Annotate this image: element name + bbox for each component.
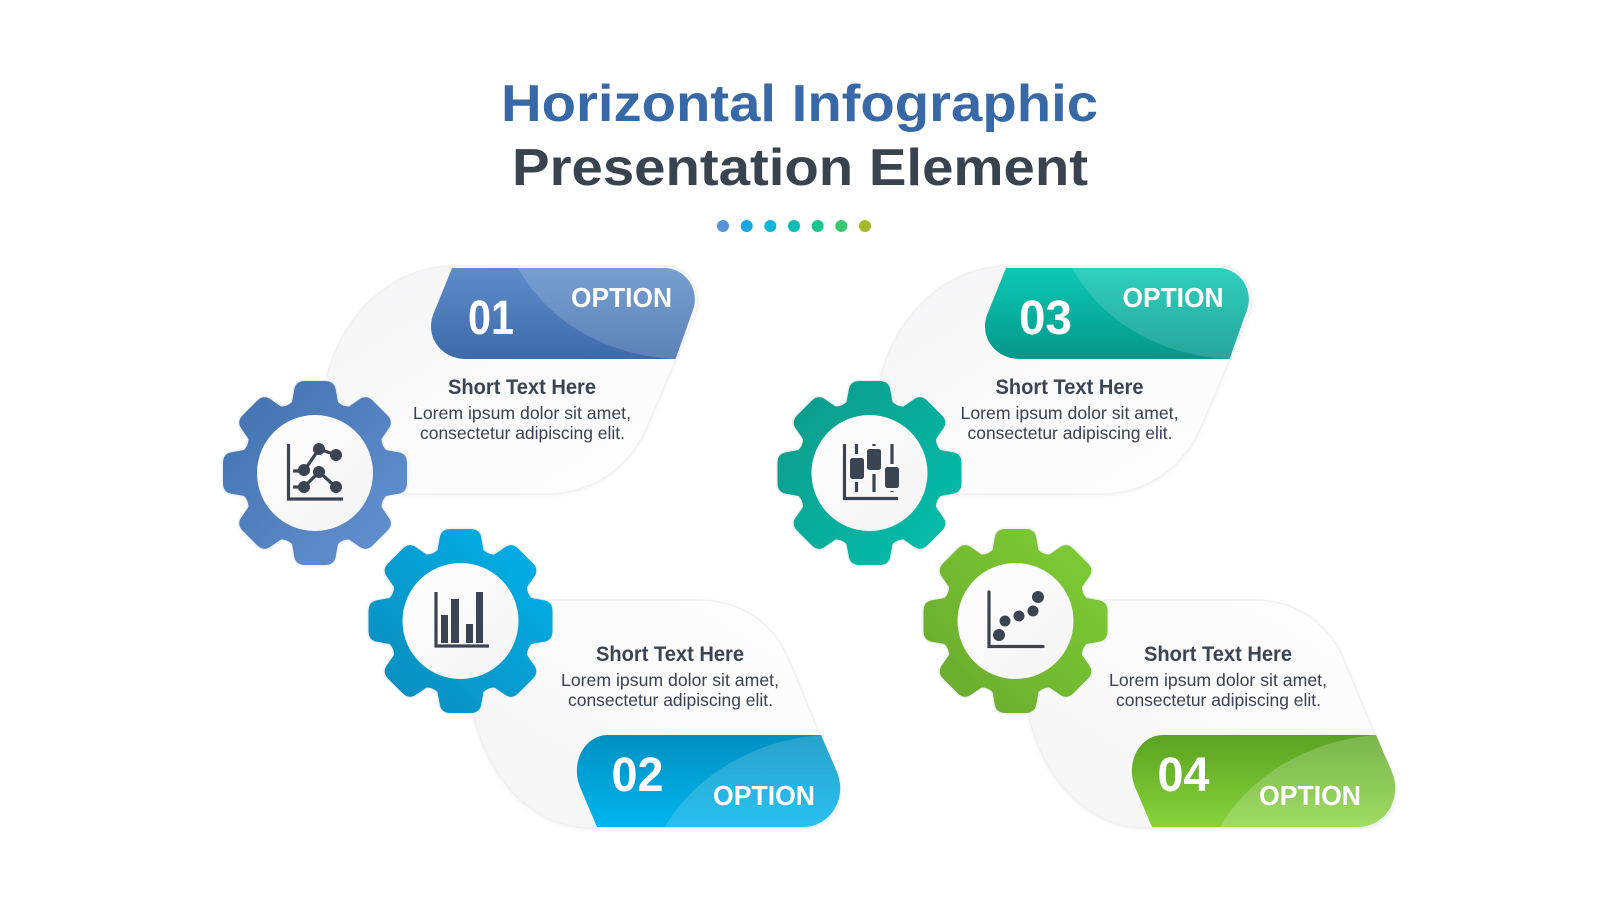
title <box>501 75 1098 197</box>
panel: option 02 <box>470 600 841 828</box>
text: option 01 <box>413 376 631 443</box>
title: Presentation Element <box>512 139 1088 197</box>
text: option 01: consectetur adipiscing elit. <box>420 423 625 443</box>
text: option 01: Lorem ipsum dolor sit amet, <box>413 403 631 423</box>
header: option 03: OPTION <box>1122 282 1224 313</box>
header: option 04: OPTION <box>1259 780 1361 811</box>
text: option 04: Short Text Here <box>1144 643 1292 666</box>
panel: option 01 <box>327 266 698 494</box>
header: option 04: 04 <box>1158 749 1210 802</box>
text: option 02: consectetur adipiscing elit. <box>568 690 773 710</box>
gear: option 02 <box>368 529 552 713</box>
title: Horizontal Infographic <box>501 75 1098 133</box>
text: option 03: consectetur adipiscing elit. <box>968 423 1172 443</box>
panel: option 04 <box>1025 600 1396 828</box>
header: option 01: 01 <box>468 292 514 345</box>
header: option 01: OPTION <box>571 282 672 313</box>
dotted divider <box>717 220 871 232</box>
header: option 03 <box>985 268 1249 359</box>
text: option 03 <box>960 376 1178 443</box>
gear: option 04 <box>924 529 1108 713</box>
header: option 02: OPTION <box>713 780 815 811</box>
icon: line chart <box>288 443 343 499</box>
text: option 04: Lorem ipsum dolor sit amet, <box>1109 670 1327 690</box>
text: option 02: Lorem ipsum dolor sit amet, <box>561 670 779 690</box>
icon: scatter chart <box>989 591 1044 646</box>
gear: option 03 <box>778 381 962 565</box>
icon: candlestick chart <box>844 444 899 498</box>
header: option 03: 03 <box>1019 292 1072 345</box>
text: option 02 <box>561 643 779 710</box>
text: option 02: Short Text Here <box>596 643 744 666</box>
text: option 03: Lorem ipsum dolor sit amet, <box>960 403 1178 423</box>
header: option 02: 02 <box>612 749 664 802</box>
text: option 04: consectetur adipiscing elit. <box>1116 690 1321 710</box>
icon: bar chart <box>436 592 489 646</box>
panel: option 03 <box>881 266 1252 494</box>
text: option 04 <box>1109 643 1327 710</box>
header: option 01 <box>431 268 695 359</box>
gear: option 01 <box>223 381 407 565</box>
text: option 03: Short Text Here <box>996 376 1144 399</box>
header: option 02 <box>577 735 840 827</box>
text: option 01: Short Text Here <box>448 376 596 399</box>
header: option 04 <box>1132 735 1395 827</box>
